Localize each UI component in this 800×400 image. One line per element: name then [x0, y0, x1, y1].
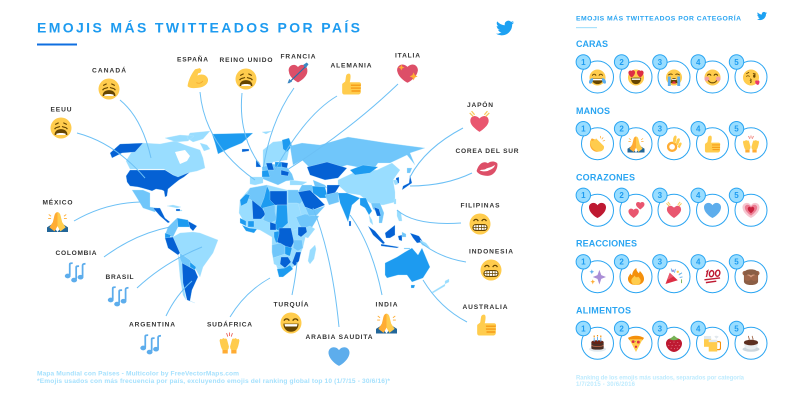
panel: manos: 1: [581, 125, 586, 134]
callout: Indonesia: INDONESIA: [469, 248, 513, 256]
panel: corazones: 5: [734, 191, 739, 200]
panel: manos: MANOS: [576, 106, 610, 116]
panel: alimentos: 2: [619, 324, 624, 333]
callout: Corea del Sur: [456, 148, 519, 176]
panel: caras: [576, 39, 767, 93]
panel: alimentos: 5: [734, 324, 739, 333]
callout: Italia: ITALIA: [395, 52, 420, 60]
arrow: Francia: [263, 88, 294, 170]
callout: Sudáfrica: [207, 320, 252, 354]
world map: [110, 131, 449, 303]
panel: reacciones: 4: [696, 258, 701, 267]
arrow: Reino Unido: [241, 93, 260, 165]
panel: reacciones: REACCIONES: [576, 239, 637, 249]
callout: México: MÉXICO: [42, 198, 72, 206]
callout: Colombia: COLOMBIA: [56, 250, 97, 257]
panel: reacciones: 2: [619, 258, 624, 267]
leader lines: [74, 84, 472, 327]
callout: Canadá: CANADÁ: [92, 66, 126, 74]
panel: reacciones: [576, 239, 767, 293]
panel: caras: 1: [581, 58, 586, 67]
panel: corazones: 1: [581, 191, 586, 200]
callout: EEUU: EEUU: [50, 106, 72, 114]
callout: Australia: AUSTRALIA: [462, 304, 508, 311]
callout: Turquía: [274, 300, 309, 334]
callout: España: [177, 54, 208, 88]
callout: Reino Unido: [220, 57, 272, 90]
panel: caras: 4: [696, 58, 701, 67]
callout: Arabia Saudita: ARABIA SAUDITA: [306, 334, 373, 341]
arrow: Japón: [410, 128, 463, 177]
arrow: Alemania: [275, 96, 337, 170]
arrow: Arabia Saudita: [313, 208, 339, 327]
arrow: India: [350, 215, 382, 295]
panel: corazones: 2: [619, 191, 624, 200]
sidebar heading: EMOJIS MÁS TWITTEADOS POR CATEGORÍA: [576, 14, 741, 22]
callout: Alemania: [330, 62, 372, 94]
callout: Argentina: [129, 322, 175, 354]
panel: alimentos: 1: [581, 324, 586, 333]
footnote: map credit and method: [37, 370, 390, 385]
callout: Italia: [395, 52, 420, 83]
callout: Argentina: ARGENTINA: [129, 322, 175, 328]
panel: manos: [576, 106, 767, 160]
panel: alimentos: 3: [658, 324, 663, 333]
arrow: Corea del Sur: [410, 173, 472, 186]
panel: alimentos: 4: [696, 324, 701, 333]
callout: Filipinas: [460, 202, 500, 234]
panel: caras: 2: [619, 58, 624, 67]
map: europe: [250, 138, 294, 185]
panel: caras: 3: [658, 58, 663, 67]
callout: Indonesia: [469, 248, 513, 280]
panel: corazones: 3: [658, 191, 663, 200]
callout: México: [42, 198, 72, 232]
callout: Francia: [280, 54, 316, 84]
arrow: Filipinas: [397, 210, 461, 223]
arrow: Indonesia: [420, 242, 466, 262]
panel: caras: CARAS: [576, 39, 608, 49]
arrow: EEUU: [77, 133, 145, 178]
callout: Brasil: [106, 274, 134, 306]
arrow: Sudáfrica: [230, 278, 270, 317]
panel: caras: 5: [734, 58, 739, 67]
panel: corazones: 4: [696, 191, 701, 200]
callout: Turquía: TURQUÍA: [274, 300, 309, 308]
panel: reacciones: 1: [581, 258, 586, 267]
title: EMOJIS MÁS TWITTEADOS POR PAÍS: [37, 20, 360, 36]
footnote: ranking note: [576, 376, 745, 388]
callout: India: INDIA: [376, 302, 398, 308]
map: oceania: [385, 248, 449, 293]
callout: Sudáfrica: SUDÁFRICA: [207, 320, 252, 328]
callout: Canadá: [92, 66, 126, 100]
callout: India: [376, 302, 398, 334]
map: greenland and iceland: [212, 131, 272, 154]
panel: corazones: CORAZONES: [576, 172, 635, 182]
map: asia: [290, 137, 430, 249]
panel: alimentos: ALIMENTOS: [576, 305, 631, 315]
map: africa: [239, 185, 319, 277]
panel: reacciones: 3: [658, 258, 663, 267]
arrow: Turquía: [292, 262, 297, 295]
arrow: Brasil: [137, 247, 202, 288]
arrow: Canadá: [120, 100, 151, 158]
icon: twitter bird: [496, 21, 514, 35]
callout: Corea del Sur: COREA DEL SUR: [456, 148, 519, 155]
callout: Francia: FRANCIA: [280, 54, 316, 60]
footnote: ranking note: 1/7/2015 - 30/6/2016: [576, 382, 636, 388]
arrow: Australia: [423, 280, 467, 322]
callout: Japón: [467, 100, 493, 132]
arrow: Argentina: [166, 281, 192, 316]
arrow: México: [74, 202, 140, 221]
callout: Reino Unido: REINO UNIDO: [220, 57, 272, 64]
callout: Japón: JAPÓN: [467, 100, 493, 109]
callout: Arabia Saudita: [306, 334, 373, 366]
panel: manos: 3: [658, 125, 663, 134]
footnote: map credit and method: *Emojis usados con más frecuencia por país, excluyendo emojis del ranking global top 10 (1/7/15 - 30/6/16)*: [37, 378, 390, 385]
panel: alimentos: [576, 305, 767, 359]
panel: manos: 5: [734, 125, 739, 134]
callout: Alemania: ALEMANIA: [330, 62, 372, 70]
footnote: map credit and method: Mapa Mundial con Países - Multicolor by FreeVectorMaps.com: [37, 370, 239, 378]
callout: Filipinas: FILIPINAS: [460, 202, 500, 210]
arrow: Italia: [287, 84, 398, 170]
panel: reacciones: 5: [734, 258, 739, 267]
map: north america: [110, 131, 210, 223]
panel: manos: 4: [696, 125, 701, 134]
panel: manos: 2: [619, 125, 624, 134]
callout: Colombia: [56, 250, 97, 282]
arrow: Colombia: [104, 227, 170, 257]
footnote: ranking note: Ranking de los emojis más usados, separados por categoría: [576, 376, 745, 382]
arrow: España: [200, 92, 255, 180]
callout: Brasil: BRASIL: [106, 274, 134, 281]
callout: EEUU: [50, 106, 72, 138]
callout: España: ESPAÑA: [177, 54, 208, 64]
map: south america: [165, 218, 218, 303]
icon: small twitter bird: [757, 12, 767, 20]
panel: corazones: [576, 172, 767, 226]
callout: Australia: [462, 304, 508, 336]
